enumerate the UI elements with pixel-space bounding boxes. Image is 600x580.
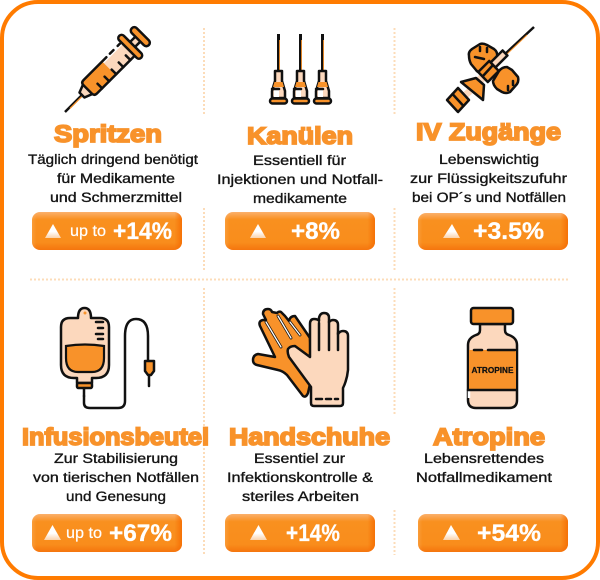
description [217, 153, 383, 206]
heading: Kanülen [247, 123, 353, 150]
stat badge: up to [66, 525, 102, 542]
panel: Kanülen [217, 34, 383, 250]
description: Essentiel zur [254, 451, 346, 466]
stat badge [32, 212, 182, 250]
icon: gloves [253, 309, 348, 406]
stat badge [32, 514, 182, 552]
stat badge: up to [70, 223, 106, 240]
description: Täglich dringend benötigt [28, 152, 198, 167]
description: Zur Stabilisierung [54, 451, 178, 466]
panel: IV Zugänge [410, 27, 568, 250]
description: bei OP´s und Notfällen [412, 190, 566, 205]
description: Essentiell für [253, 153, 347, 168]
heading: Spritzen [54, 121, 162, 148]
description: Lebenswichtig [439, 152, 539, 167]
icon: vial [468, 308, 517, 408]
description [416, 451, 552, 485]
stat badge [418, 514, 568, 552]
description: und Genesung [66, 489, 166, 504]
stat badge: +14% [286, 520, 340, 547]
stat badge [418, 213, 568, 250]
description: Notfallmedikament [416, 470, 552, 485]
icon: needles [270, 34, 331, 104]
description [28, 152, 198, 205]
icon: syringe [54, 23, 154, 123]
stat badge: +3.5% [473, 218, 544, 245]
stat badge: +54% [477, 520, 541, 547]
description [410, 152, 568, 205]
stat badge [225, 514, 375, 552]
description [227, 451, 373, 504]
heading: IV Zugänge [416, 119, 561, 146]
description: steriles Arbeiten [242, 489, 359, 504]
description: zur Flüssigkeitszufuhr [410, 171, 568, 186]
heading: Infusionsbeutel [22, 424, 209, 451]
stat badge: +14% [113, 218, 172, 245]
panel: Atropine [416, 308, 568, 552]
panel: Spritzen [28, 23, 198, 250]
panel: Handschuhe [225, 309, 390, 552]
description: Lebensrettendes [424, 451, 544, 466]
icon: IV cannula [447, 27, 534, 112]
description: von tierischen Notfällen [33, 470, 199, 485]
heading: Atropine [433, 424, 545, 451]
stat badge: +67% [109, 520, 172, 547]
stat badge [225, 212, 375, 250]
stat badge: +8% [291, 218, 340, 245]
description: Injektionen und Notfall- [217, 172, 383, 187]
vial label: ATROPINE [472, 365, 514, 375]
description: Infektionskontrolle & [227, 470, 373, 485]
description: und Schmerzmittel [50, 190, 182, 205]
panel: Infusionsbeutel [22, 308, 209, 552]
heading: Handschuhe [229, 424, 390, 451]
description: für Medikamente [57, 171, 175, 186]
icon: infusion bag [61, 308, 154, 408]
description: medikamente [253, 191, 347, 206]
description [33, 451, 199, 504]
